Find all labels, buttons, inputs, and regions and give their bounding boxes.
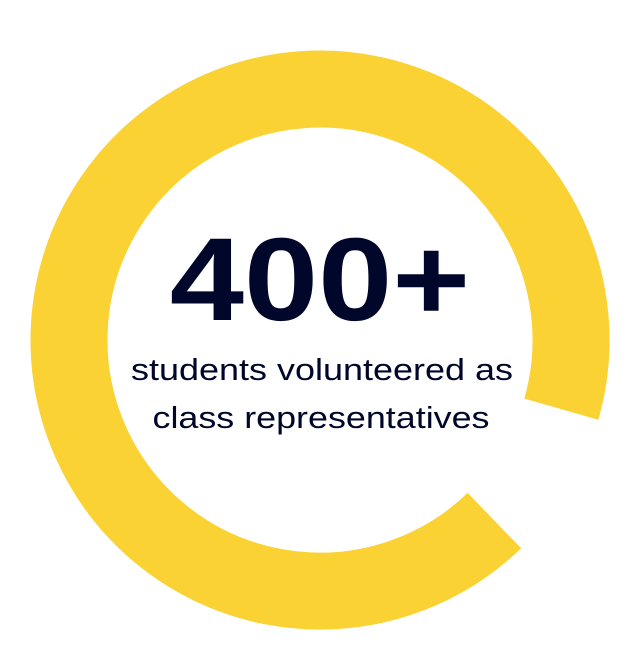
description text — [131, 352, 513, 435]
big number: 400+ — [170, 213, 470, 345]
description text: students volunteered as — [131, 352, 513, 387]
description text: class representatives — [152, 400, 490, 435]
yellow ring arc — [69, 89, 571, 591]
